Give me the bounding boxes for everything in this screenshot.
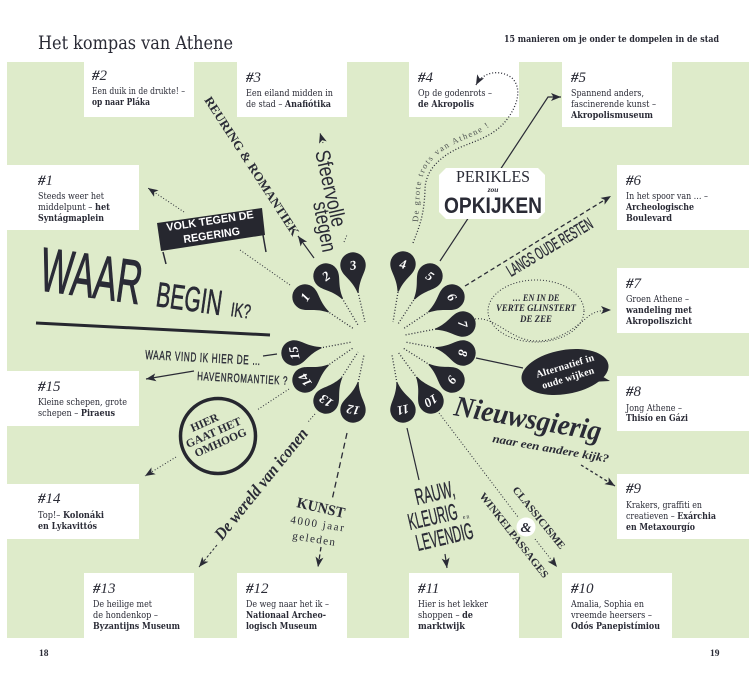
card #1: Syntágmaplein: [38, 213, 105, 224]
label: kunst 4000 jaar geleden with arrow: [290, 433, 347, 567]
card #3: #3: [245, 70, 261, 86]
card #14: Top!– Kolonáki: [38, 510, 105, 521]
heading: waar begin ik: IK?: [229, 299, 252, 324]
label: waar vind ik hier de havenromantiek with arrow: HAVENROMANTIEK ?: [197, 369, 288, 388]
label: sfeervolle stegen with arrow: Sfeervolle: [310, 148, 350, 229]
callout: perikles zou opkijken: PERIKLES: [456, 167, 530, 186]
pin 10: [406, 370, 448, 418]
card #6: #6: [625, 173, 642, 189]
dotted oval: en in de verte glinstert de zee: [475, 280, 611, 342]
card #13: Byzantijns Museum: [93, 621, 180, 632]
card #11: Hier is het lekker: [418, 599, 489, 610]
card #7: [617, 268, 749, 333]
card #8: Jong Athene –: [625, 403, 682, 414]
pin 4: [386, 249, 418, 294]
card #10: vreemde heersers –: [570, 610, 652, 621]
label: rauw, kleurig en levendig: KLEURIG: [405, 498, 460, 535]
pin 2: 2: [318, 268, 333, 285]
card #1: Steeds weer het: [38, 191, 105, 202]
card #3: [237, 62, 347, 117]
arrow: pin 10 to card 10 with ampersand: &: [521, 521, 532, 536]
card #13: De heilige met: [93, 599, 153, 610]
card #11: #11: [417, 581, 439, 597]
dotted oval: en in de verte glinstert de zee: DE ZEE: [519, 314, 552, 324]
label: waar vind ik hier de havenromantiek with arrow: WAAR VIND IK HIER DE …: [145, 347, 261, 368]
card #14: en Lykavittós: [38, 521, 97, 532]
card #13: [84, 573, 194, 638]
pin 2: [308, 258, 353, 306]
card #7: Akropoliszicht: [625, 316, 692, 327]
card #13: #13: [92, 581, 116, 597]
pin 7: [433, 309, 478, 342]
pin 12: 12: [345, 401, 361, 419]
curved label: de grote trots van athene: De grote trots van Athene !: [412, 122, 488, 222]
card #10: Odós Panepistímiou: [571, 621, 660, 632]
label: reuring en romantiek with arrow: REURING & ROMANTIEK: [201, 94, 302, 239]
heading: nieuwsgierig naar een andere kijk: [451, 390, 615, 486]
banner: volk tegen de regering: [157, 208, 266, 264]
card #12: logisch Museum: [246, 621, 317, 632]
card #9: Krakers, graffiti en: [626, 500, 702, 511]
speech bubble: alternatief in oude wijken: Alternatief in: [535, 352, 596, 381]
label: classicisme: CLASSICISME: [510, 485, 567, 552]
card #12: #12: [245, 581, 269, 597]
card #4: [409, 62, 519, 117]
card #5: fascinerende kunst –: [571, 99, 656, 110]
card #10: #10: [570, 581, 594, 597]
card #6: Archeologische: [625, 202, 695, 213]
card #10: Amalia, Sophia en: [570, 599, 644, 610]
card #14: [7, 484, 139, 539]
badge: hier gaat het omhoog: GAAT HET: [184, 416, 244, 451]
pin 14: [287, 354, 335, 398]
card #5: #5: [570, 70, 586, 86]
pin 8: [433, 335, 478, 368]
label: kunst 4000 jaar geleden with arrow: KUNST: [295, 495, 346, 522]
compass dotted spokes: [320, 292, 437, 383]
card #1: #1: [37, 173, 53, 189]
pin 10: 10: [421, 391, 440, 411]
card #2: op naar Pláka: [92, 97, 150, 108]
heading: nieuwsgierig naar een andere kijk: Nieuwsgierig: [451, 390, 604, 448]
pin 15: [279, 335, 324, 368]
card #12: De weg naar het ik –: [246, 599, 329, 610]
card #4: Op de godenrots –: [418, 88, 492, 99]
pin 11: 11: [395, 401, 411, 419]
card #2: Een duik in de drukte! –: [92, 86, 185, 97]
arrow: pin 1 to card 1: [148, 188, 290, 285]
pin 3: [338, 250, 371, 295]
card #13: de hondenkop –: [93, 610, 158, 621]
pin 11: [385, 380, 418, 425]
pin 3: 3: [347, 257, 358, 273]
arrow: pin 6 to card 6: [465, 196, 611, 286]
label: langs oude resten: LANGS OUDE RESTEN: [503, 214, 596, 280]
pin 5: [404, 258, 448, 306]
card #11: marktwijk: [418, 621, 466, 632]
card #8: Thisío en Gázi: [626, 413, 689, 424]
pin 8: 8: [455, 348, 471, 358]
card #4: de Akropolis: [418, 99, 474, 110]
card #1: [7, 165, 139, 230]
card #7: #7: [625, 276, 642, 292]
card #15: schepen – Piraeus: [38, 408, 115, 419]
card #4: #4: [417, 70, 434, 86]
pin 13: 13: [316, 391, 336, 411]
heading: waar begin ik: BEGIN: [154, 275, 225, 323]
dotted oval: en in de verte glinstert de zee: … EN IN DE: [512, 293, 560, 303]
pin 6: [422, 279, 470, 323]
card #12: [237, 573, 347, 638]
subtitle: 15 manieren om je onder te dompelen in de stad: [504, 35, 719, 45]
pin 13: [308, 371, 352, 419]
pin 7: 7: [455, 319, 471, 329]
card #10: [562, 573, 672, 638]
title: Het kompas van Athene: [38, 32, 233, 54]
curved dotted arrow to card 4: [413, 73, 518, 243]
pin 12: [338, 380, 371, 425]
pin 15: 15: [285, 345, 303, 361]
card #8: [617, 376, 749, 431]
card #15: Kleine schepen, grote: [38, 397, 127, 408]
card #6: Boulevard: [626, 213, 672, 224]
badge: hier gaat het omhoog: OMHOOG: [193, 426, 249, 460]
label: rauw, kleurig en levendig: LEVENDIG: [413, 517, 476, 556]
badge: hier gaat het omhoog: [145, 389, 289, 476]
card #9: en Metaxourgío: [626, 522, 695, 533]
arrow: pin 10 to card 10 with ampersand: [439, 413, 557, 567]
pin 5: 5: [423, 268, 437, 284]
card #3: Een eiland midden in: [246, 88, 333, 99]
card #8: #8: [625, 384, 642, 400]
arrow: pin 11 line: [407, 428, 419, 480]
card #11: shoppen – de: [418, 610, 474, 621]
dotted oval: en in de verte glinstert de zee: VERTE GLINSTERT: [496, 303, 576, 313]
card #7: wandeling met: [625, 305, 692, 316]
card #5: Spannend anders,: [571, 88, 644, 99]
card #3: de stad – Anafiótika: [246, 99, 331, 110]
card #6: [617, 165, 749, 230]
heading: nieuwsgierig naar een andere kijk: naar een andere kijk?: [491, 433, 610, 465]
speech bubble: alternatief in oude wijken: oude wijken: [541, 365, 596, 392]
card #1: middelpunt – het: [38, 202, 110, 213]
label: winkelpassages: WINKELPASSAGES: [477, 491, 550, 581]
card #9: #9: [625, 481, 642, 497]
callout: perikles zou opkijken: [439, 167, 545, 219]
label: rauw, kleurig en levendig: en: [462, 514, 471, 521]
pin 9: 9: [444, 373, 460, 387]
card #15: [7, 371, 139, 426]
callout: perikles zou opkijken: OPKIJKEN: [444, 193, 542, 218]
label: kunst 4000 jaar geleden with arrow: 4000 jaar: [290, 514, 345, 534]
label: rauw, kleurig en levendig: RAUW,: [412, 476, 457, 510]
card #11: [409, 573, 519, 638]
arrow: pin 5 to card 5: [440, 97, 561, 261]
label: waar vind ik hier de havenromantiek with arrow: [145, 347, 288, 388]
pin 14: 14: [295, 370, 315, 390]
card #2: #2: [91, 68, 108, 84]
card #6: In het spoor van … –: [626, 191, 708, 202]
pin 4: 4: [398, 256, 408, 272]
card #2: [84, 62, 194, 117]
badge: hier gaat het omhoog: HIER: [189, 412, 221, 435]
callout: perikles zou opkijken: zou: [487, 185, 498, 194]
label: kunst 4000 jaar geleden with arrow: geleden: [292, 530, 336, 549]
heading: waar begin ik: WAAR: [36, 236, 147, 318]
pin 6: 6: [444, 290, 460, 304]
compass pins: [279, 249, 478, 425]
label: de wereld van iconen with arrow: De wereld van iconen: [210, 424, 312, 544]
banner: volk tegen de regering: REGERING: [183, 226, 241, 246]
pin 1: 1: [297, 290, 313, 304]
page number left: 18: [39, 649, 49, 659]
pin 1: [287, 279, 335, 323]
banner: volk tegen de regering: VOLK TEGEN DE: [166, 209, 254, 234]
card #5: [562, 62, 672, 127]
card #12: Nationaal Archeo-: [246, 610, 326, 621]
card #9: [617, 474, 749, 539]
card #14: #14: [37, 491, 61, 507]
label: sfeervolle stegen with arrow: stegen: [308, 200, 340, 254]
label: rauw, kleurig en levendig: [405, 476, 476, 568]
speech bubble: alternatief in oude wijken: [476, 343, 612, 401]
pin 9: [422, 354, 470, 398]
page number right: 19: [710, 649, 720, 659]
card #7: Groen Athene –: [626, 294, 689, 305]
card #15: #15: [37, 379, 61, 395]
card #9: creatieven – Exárchia: [626, 511, 716, 522]
card #5: Akropolismuseum: [570, 110, 653, 121]
